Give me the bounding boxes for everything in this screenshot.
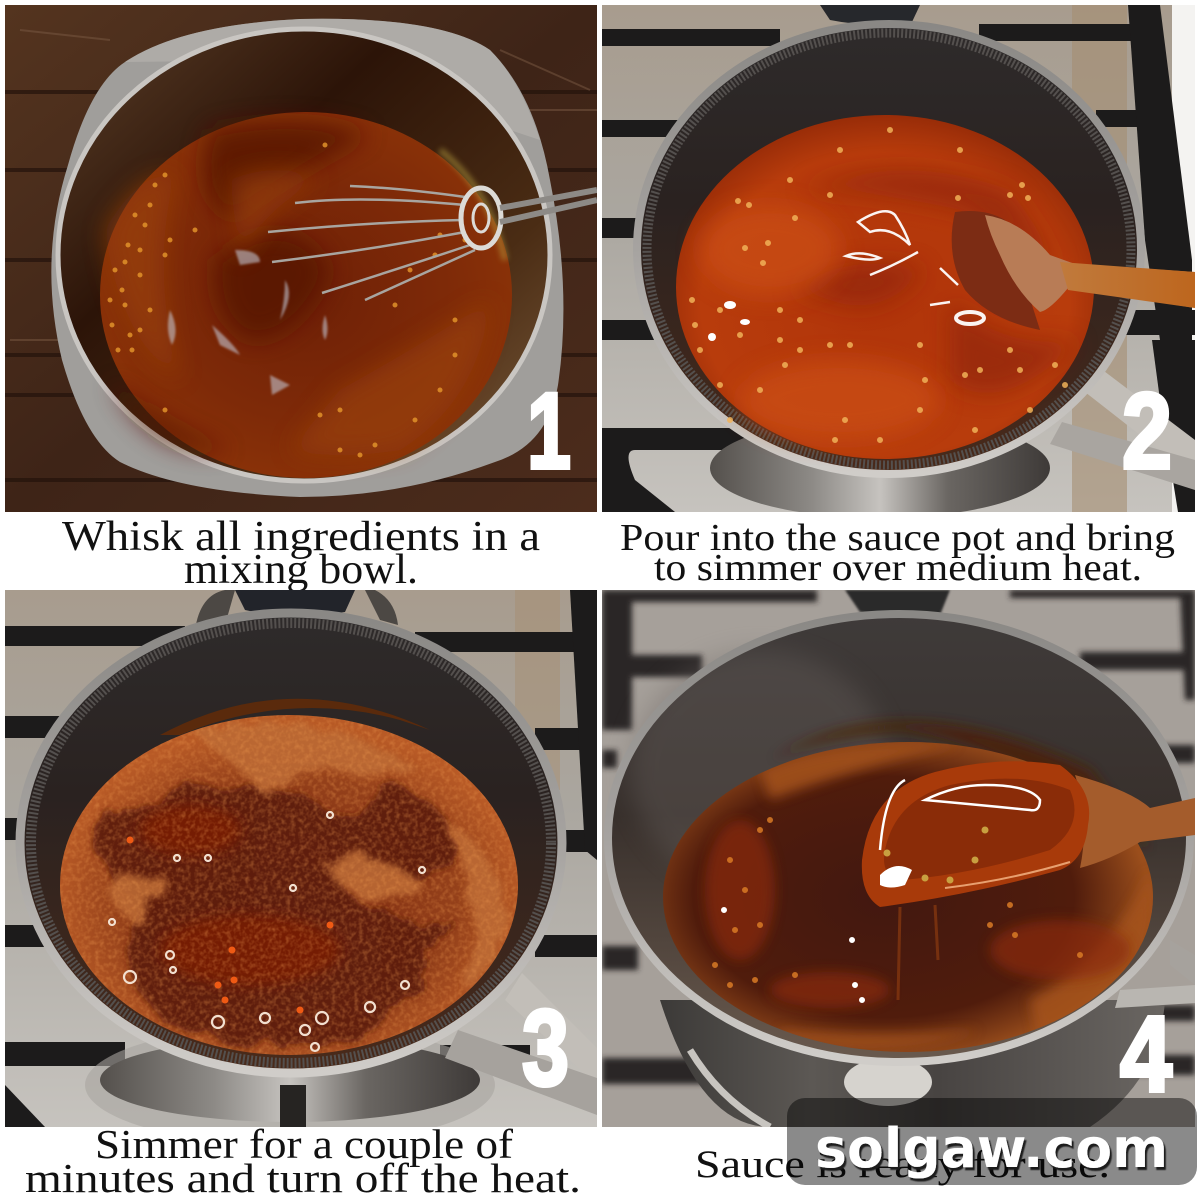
watermark [787,1098,1197,1185]
sauce swirls [105,121,490,455]
panel: step 3 photo of simmering sauce [5,590,597,1145]
caption step 4: Sauce is ready for use. [695,1143,1110,1186]
sauce pot [606,612,1192,1064]
wooden spoon with sauce [862,761,1195,1000]
panel: step 1 photo of whisking in a mixing bowl [5,5,597,512]
caption step 2 [620,517,1175,589]
panel: step 2 photo of sauce in the pot [602,5,1195,518]
pot underside and handle [85,974,597,1127]
pot underside and handle [710,368,1195,518]
whisk [268,186,597,300]
garlic specks [110,145,465,455]
caption step 2: Pour into the sauce pot and bring [620,517,1175,559]
pot underside and handle [660,985,1195,1127]
caption step 3 [25,1121,581,1200]
wooden spoon [952,211,1195,330]
panel: step 4 photo of finished sauce on spoon [602,590,1195,1127]
caption step 3: minutes and turn off the heat. [25,1155,581,1200]
caption step 2: to simmer over medium heat. [654,547,1142,589]
step number 2: 2 [1122,370,1172,491]
caption step 1 [62,514,540,593]
caption step 1: mixing bowl. [184,547,418,593]
mixing bowl [51,19,563,497]
stove grates [602,590,1195,1084]
step number 3: 3 [522,987,569,1108]
stove grates [5,590,597,1127]
step number 1: 1 [527,370,571,491]
watermark: solgaw.com [815,1117,1168,1180]
caption step 3: Simmer for a couple of [95,1121,513,1167]
step number 4: 4 [1120,993,1172,1114]
sauce pot [18,611,564,1075]
caption step 1: Whisk all ingredients in a [62,514,540,560]
sauce pot [635,22,1143,476]
stove grates [602,5,1195,512]
